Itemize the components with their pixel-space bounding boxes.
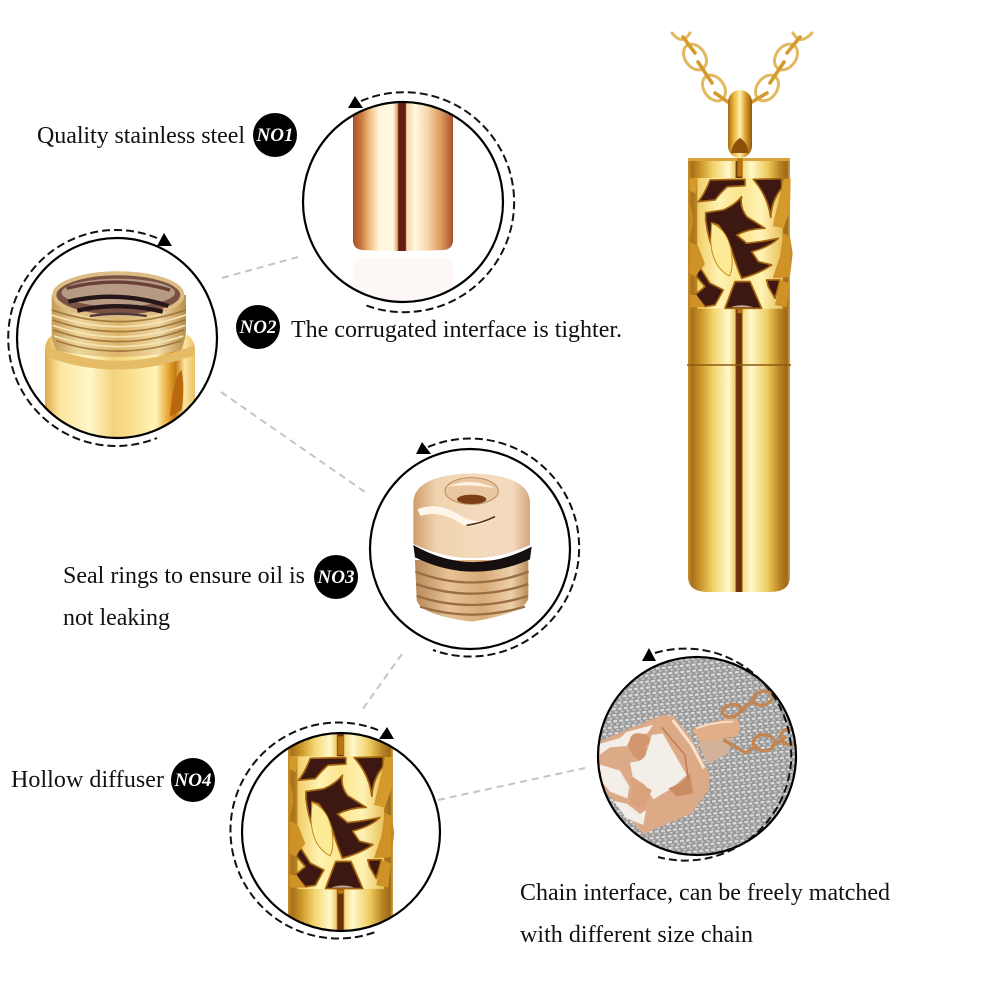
threaded neck <box>52 295 186 357</box>
panel: NO4 hollow diffuser detail <box>230 722 440 938</box>
label: NO1 <box>37 113 297 157</box>
label: NO4: Hollow diffuser <box>11 767 164 793</box>
panel: NO3 seal ring detail <box>370 439 579 657</box>
leaf cutout pattern <box>688 158 793 313</box>
label: NO4 <box>11 758 215 802</box>
seam <box>687 364 791 366</box>
label: NO4: NO4 <box>174 770 211 791</box>
reflection <box>353 258 453 300</box>
label: chain interface <box>520 880 890 948</box>
label: NO3: Seal rings to ensure oil is <box>63 563 305 589</box>
threads <box>415 560 528 622</box>
arrowhead <box>379 727 394 739</box>
chain <box>672 33 812 105</box>
label: chain interface: with different size chain <box>520 922 753 948</box>
arrowhead <box>157 233 172 246</box>
panel: NO2 corrugated interface detail <box>8 230 217 447</box>
cap <box>413 473 530 558</box>
bail <box>728 90 752 158</box>
label: chain interface: Chain interface, can be freely matched <box>520 880 890 906</box>
top hole <box>445 478 498 504</box>
filigree shading <box>628 733 650 761</box>
label: NO1: Quality stainless steel <box>37 123 245 149</box>
arrowhead <box>416 442 431 454</box>
label: NO1: NO1 <box>256 125 293 146</box>
dashed arc <box>8 230 157 446</box>
dashed arc <box>428 439 579 657</box>
pendant body <box>688 158 790 592</box>
chain links <box>721 689 799 753</box>
label: NO3: NO3 <box>317 567 354 588</box>
label: NO3: not leaking <box>63 605 170 631</box>
body <box>45 333 195 447</box>
white stone windows <box>598 725 687 825</box>
label: NO2: NO2 <box>239 317 277 338</box>
dashed arc <box>361 92 514 312</box>
rim <box>54 273 182 317</box>
panel: NO1 stainless steel detail <box>303 92 514 312</box>
dashed arc <box>230 722 378 938</box>
arrowhead <box>348 96 363 108</box>
connector: NO2 to NO3 <box>221 392 365 492</box>
dashed arc <box>655 649 791 861</box>
pendant necklace photo <box>672 33 812 592</box>
rose gold cylinder <box>353 100 453 251</box>
arrowhead <box>642 648 656 661</box>
connector: NO3 to NO4 <box>362 654 402 710</box>
black seal <box>413 545 532 572</box>
pendant body <box>595 715 710 834</box>
collar highlight <box>673 720 704 768</box>
label: NO2 <box>236 305 622 349</box>
panel: chain interface detail <box>590 648 805 865</box>
connector: NO4 to chain interface <box>438 768 585 800</box>
bail <box>692 718 740 743</box>
label: NO3 <box>63 555 358 631</box>
label: NO2: The corrugated interface is tighter. <box>291 317 622 343</box>
connector: NO1 to NO2 <box>222 257 298 278</box>
